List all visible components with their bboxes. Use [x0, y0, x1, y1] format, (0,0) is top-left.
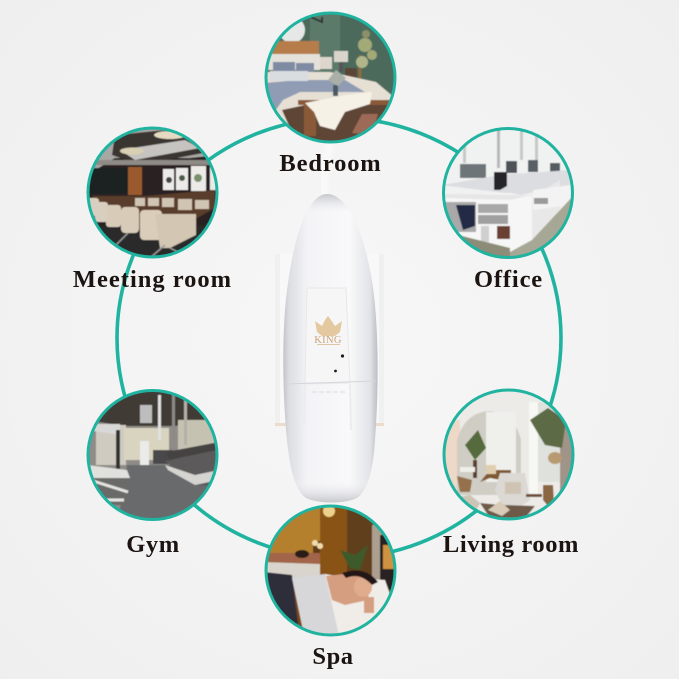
- photo: gym: [87, 389, 220, 521]
- front panel: [305, 288, 350, 384]
- ring: living room: [444, 390, 573, 519]
- ring: meeting room: [88, 128, 217, 257]
- label: Living room: Living room: [443, 531, 579, 558]
- ring: gym: [88, 390, 217, 520]
- label: Gym: Gym: [126, 531, 180, 558]
- label: Bedroom: Bedroom: [279, 150, 382, 177]
- wall plate behind diffuser: [275, 254, 384, 426]
- photo: bedroom: [268, 14, 394, 140]
- ring: spa: [266, 506, 395, 635]
- steam: [323, 10, 345, 195]
- diffuser product: [283, 194, 378, 502]
- brand logo: KING: [314, 335, 342, 346]
- label: Meeting room: Meeting room: [73, 266, 232, 293]
- indicator dots: [334, 354, 344, 372]
- photo: living room: [446, 392, 572, 518]
- photo: meeting room: [87, 127, 219, 260]
- brand logo: [314, 316, 342, 346]
- photo: spa: [268, 508, 394, 634]
- label: Spa: Spa: [312, 643, 354, 670]
- seam: [285, 381, 376, 384]
- ring: bedroom: [266, 13, 395, 142]
- label: Office: Office: [474, 266, 543, 293]
- connecting ring: [117, 118, 561, 558]
- ring: office: [444, 128, 572, 258]
- photo: office: [446, 130, 571, 256]
